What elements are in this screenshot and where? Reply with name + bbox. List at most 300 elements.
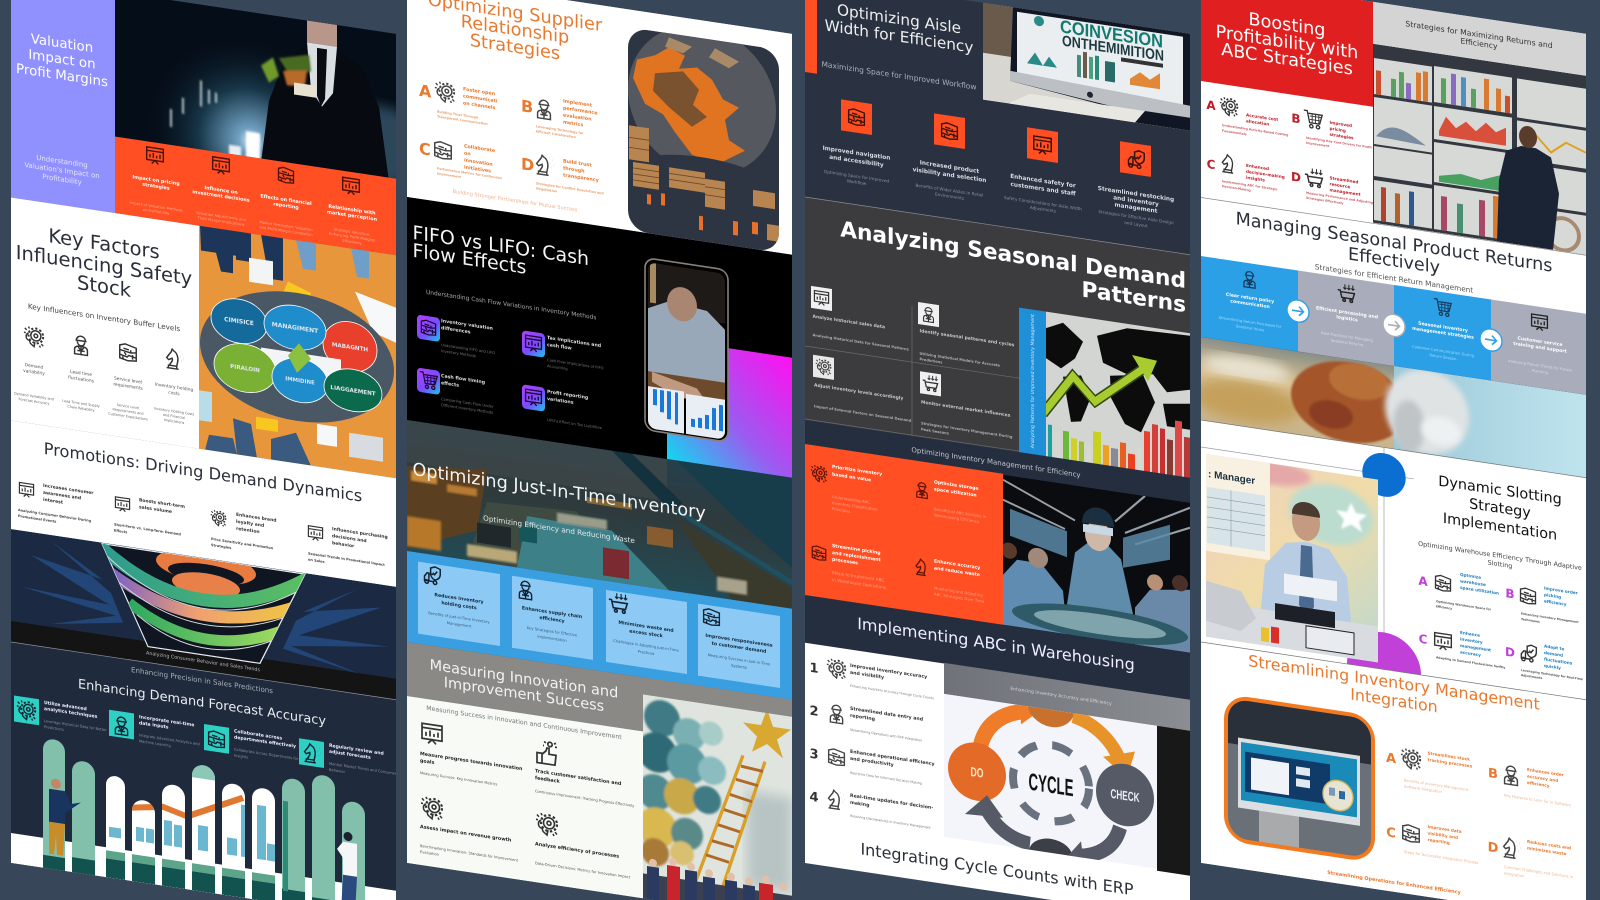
item B: performance [563, 105, 598, 117]
item: tax implications [522, 330, 604, 376]
card: supply chain: efficiency [539, 615, 565, 625]
item C: Decision-Making [1222, 184, 1251, 192]
slide: valuation impact [11, 0, 396, 256]
item: storage: space utilization [934, 486, 977, 499]
item: holding costs: and Financial [163, 413, 185, 420]
list item 3: and productivity [850, 756, 894, 768]
item: investment: investment decisions [192, 189, 250, 204]
item: financial reporting: and Profit Margin Correlation [259, 225, 313, 237]
item C: Improvement [437, 172, 462, 179]
panel: navy background [11, 642, 396, 900]
heading: key factors: Influencing Safety [16, 241, 193, 290]
item D: Adapt to [1544, 643, 1565, 652]
subtitle: maximizing space: Maximizing Space for Improved Workflow [821, 60, 977, 92]
item A: Benefits of Inventory Management [1404, 778, 1469, 792]
item: service level [108, 341, 148, 422]
item: holding costs: Implications [164, 418, 184, 425]
item: revenue growth: Assess impact on revenue growth [420, 824, 512, 844]
side strip label: Analyzing Patterns for Improved Inventory Management [1030, 313, 1036, 449]
item: prioritize: Prioritize inventory [832, 464, 882, 478]
item: prioritize: based on value [832, 472, 871, 483]
item D: Measuring Performance and Adjusting [1306, 191, 1373, 205]
heading: supplier relationships: Relationship [461, 11, 569, 48]
item: historical sales [811, 286, 909, 352]
item D: Integration [1504, 871, 1525, 879]
item: safety: Safety Considerations for Aisle Width [1004, 195, 1082, 212]
card: holding costs: Management [447, 621, 472, 629]
item: process efficiency [535, 812, 631, 880]
slide: promotions [11, 420, 396, 700]
item: service level: Service Level [117, 403, 139, 410]
item: demand variability: Forecast Accuracy [19, 397, 49, 406]
item: visibility: Benefits of Wider Aisles in Retail [916, 183, 983, 198]
heading: boosting profitability: Profitability with [1216, 22, 1358, 64]
column 4 [1191, 0, 1586, 900]
item B: picking [1544, 592, 1561, 600]
item A [419, 79, 498, 128]
list item 3 [809, 743, 935, 787]
heading: promotions: Promotions: Driving Demand Dynamics [44, 439, 362, 506]
panel: purple title [11, 0, 115, 213]
item: tax implications: cash flow [547, 342, 572, 352]
item: profit reporting [522, 384, 602, 430]
item: picking [812, 540, 887, 591]
panel: gray strip [1373, 2, 1586, 76]
item: seasonal patterns: Predictions [920, 357, 942, 365]
panel: white [1201, 642, 1586, 900]
subtitle: cash flow variations: Understanding Cash Flow Variations in Inventory Methods [426, 289, 596, 321]
item: purchasing decisions: Seasonal Trends in Promotional Impact [308, 552, 385, 567]
heading: dynamic slotting: Implementation [1443, 511, 1557, 544]
item: pricing: on Profitability [143, 208, 170, 216]
item: accuracy: and reduce waste [934, 565, 980, 578]
item: profit reporting: Profit reporting [547, 389, 588, 401]
item: awareness: Promotional Events [18, 514, 56, 524]
step 2: Seasonal Returns [1331, 339, 1363, 347]
item: prioritize: Inventory Classification [832, 500, 878, 512]
item A [1418, 566, 1499, 618]
label DO: DO [971, 764, 984, 781]
item: collaboration: departments effectively [234, 734, 296, 750]
monitor headline: COINVESION [1060, 16, 1163, 52]
item A: A [1418, 574, 1428, 589]
caption: building partnerships: Building Stronger Partnerships for Mutual Success [453, 189, 578, 214]
band: accuracy: Enhancing Inventory Accuracy and Efficiency [1010, 686, 1112, 707]
heading: JIT: Optimizing Just-In-Time Inventory [412, 460, 706, 524]
item: customer satisfaction: Track customer satisfaction and [535, 768, 622, 787]
item: awareness: Increases consumer [43, 483, 94, 496]
slide: demand forecast [11, 642, 397, 900]
panel: white [1201, 420, 1586, 700]
item B: strategies [1330, 132, 1354, 140]
item A [1386, 744, 1473, 799]
list item 2 [809, 700, 923, 743]
item: review forecasts: adjust forecasts [329, 749, 371, 761]
item: historical sales: Analyzing Historical Data for Seasonal Patterns [812, 333, 909, 352]
item: navigation [823, 97, 890, 190]
item D [1505, 638, 1583, 686]
step 4 [1491, 300, 1586, 395]
subtitle: key influencers: Key Influencers on Inventory Buffer Levels [28, 302, 180, 333]
item D: Negotiation [536, 186, 558, 194]
item: accuracy: ABC Strategies Over Time [934, 591, 985, 604]
item A: Transparent Communication [437, 115, 488, 126]
photo: team around table [199, 225, 396, 479]
item: pricing: Impact of Valuation Methods [130, 201, 183, 213]
step 3: Return Season [1430, 353, 1457, 361]
slide: seasonal demand [805, 197, 1190, 479]
chart: world map with arrow and bars [1043, 311, 1190, 479]
subtitle: maximizing returns: Efficiency [1460, 36, 1498, 51]
item: brand loyalty: retention [236, 526, 260, 535]
heading: key factors: Key Factors [48, 224, 160, 264]
column 2 [407, 0, 792, 900]
item: purchasing decisions: on Sales [308, 558, 325, 564]
item: review forecasts: Monitor Market Trends and Consumer [329, 762, 397, 776]
item: tax implications: Tax implications and [547, 335, 601, 349]
item: historical sales: Analyze historical sales data [812, 314, 885, 330]
item: visibility: visibility and selection [913, 167, 986, 184]
table bubble labels: PIRALOIN [230, 364, 260, 374]
poster text: : Manager [1208, 469, 1255, 487]
item B [521, 92, 598, 143]
item A: allocation [1246, 118, 1269, 127]
item: progress: goals [420, 758, 435, 766]
slide: supplier relationships [407, 0, 792, 255]
panel: black [407, 197, 792, 478]
item: adjust inventory: Adjust inventory levels accordingly [814, 382, 903, 402]
item A: A [1206, 98, 1216, 113]
item: process efficiency: Data-Driven Decisions: Metrics for Innovation Impact [535, 861, 631, 880]
item: storage [917, 477, 987, 525]
item: analytics: Predictions [44, 725, 64, 732]
item: real-time data: data inputs [139, 720, 169, 731]
item: navigation: Optimizing Space for Improved [824, 169, 889, 184]
item A: Optimize [1460, 572, 1481, 580]
item: market perception: Enhancing Profit Margins [329, 232, 375, 243]
item A: tracking processes [1428, 757, 1473, 769]
item D: Common Challenges and Solutions in [1504, 865, 1574, 879]
slide: cycle counts [805, 642, 1190, 900]
item A: space utilization [1460, 585, 1499, 596]
item B: Key Features to Look for in Software [1504, 793, 1571, 808]
item: financial reporting: reporting [273, 201, 299, 211]
item: awareness: awareness and [43, 490, 81, 501]
item: lead time: Chain Reliability [67, 404, 95, 413]
item: adjust inventory [813, 355, 912, 423]
illustration: arches with analysts [11, 728, 396, 900]
heading: FIFO vs LIFO: Flow Effects [413, 239, 526, 279]
step 4: Planning [1532, 369, 1549, 375]
card: holding costs: Reduces inventory [434, 592, 484, 605]
item B: Improve order [1544, 585, 1579, 596]
item A: Foster open [463, 86, 496, 97]
item: sales volume: Short-Term vs. Long-Term Demand [114, 522, 181, 537]
item: profit reporting: LIFO's Effect on Tax Liabilities [547, 418, 602, 430]
item: cash flow timing: Different Inventory Methods [441, 403, 493, 415]
item: picking: and replenishment [832, 550, 882, 563]
arrow 2 [1383, 313, 1405, 338]
item D: through [563, 165, 585, 175]
panel: white [407, 0, 792, 255]
arrow 1 [1287, 298, 1309, 324]
item A: Fundamentals [1222, 129, 1247, 136]
subtitle: warehouse efficiency: Slotting [1488, 559, 1512, 570]
item: pricing: Impact on pricing [132, 174, 180, 187]
item D: quickly [1544, 663, 1561, 671]
slide: inventory integration [1201, 642, 1586, 900]
item: cash flow timing: Comparing Cash Flow Under [441, 397, 494, 409]
card: responsiveness: to customer demand [712, 641, 766, 655]
item D: management [1330, 187, 1361, 197]
panel: white [805, 643, 1190, 900]
item: analytics [14, 696, 107, 732]
item C: Adapting to Demand Fluctuations Swiftly [1436, 655, 1505, 670]
item: navigation: and accessibility [829, 155, 884, 169]
item: real-time data: Integrate Advanced Analytics and [139, 733, 200, 746]
item: financial reporting: Market Perception: Valuation [259, 220, 313, 232]
item B: Efficient Collaboration [536, 129, 577, 139]
list item 2: Streamlined data entry and [850, 706, 923, 723]
item C: C [1207, 157, 1216, 172]
list item 3: 3 [809, 747, 819, 763]
photo: monitor on desk [983, 3, 1190, 131]
label CYCLE: CYCLE [1028, 769, 1073, 802]
item C: Collaborate [464, 144, 496, 154]
panel: white text area [11, 198, 199, 449]
item: restocking: management [1115, 202, 1158, 215]
panel: blue side strip [1019, 308, 1046, 457]
item: restocking [1098, 138, 1174, 232]
column 3 [805, 0, 1190, 900]
subtitle: maximizing returns: Strategies for Maximizing Returns and [1405, 19, 1553, 50]
subtitle: efficiency: Optimizing Efficiency and Reducing Waste [483, 513, 635, 545]
item: real-time data: Incorporate real-time [139, 714, 194, 728]
item: awareness: interest [43, 497, 64, 506]
item C: C [1419, 632, 1428, 647]
photo: analyst at chart wall [1373, 44, 1586, 258]
item: lead time: Lead Time and Supply [62, 399, 100, 408]
item: cash flow timing [417, 368, 494, 415]
item: customer satisfaction [535, 740, 635, 808]
item A: A [419, 81, 432, 102]
item: collaboration: Insights [234, 753, 248, 760]
item: safety: Enhanced safety for [1010, 174, 1076, 190]
item: purchasing decisions: behavior [332, 540, 355, 550]
item: navigation: Improved navigation [823, 146, 890, 162]
item D: D [1488, 840, 1499, 857]
item D: minimizes waste [1527, 845, 1566, 856]
heading: seasonal returns: Effectively [1348, 245, 1440, 278]
band: accuracy [944, 663, 1190, 731]
gradient block [667, 339, 792, 478]
photo: globe and logistics [628, 15, 781, 253]
item: brand loyalty: Strategies [211, 543, 231, 550]
subtitle: precision: Enhancing Precision in Sales Predictions [131, 665, 273, 695]
item: valuation differences [417, 314, 495, 361]
item: review forecasts: Regularly review and [329, 743, 384, 757]
item: tax implications: Cash Flow Implications of FIFO [547, 358, 604, 370]
list item 1: 1 [809, 661, 819, 677]
item B: Techniques [1521, 617, 1540, 624]
item: safety: Adjustments [1030, 205, 1056, 214]
slide: just-in-time [407, 420, 792, 700]
item: sales volume: sales volume [139, 504, 172, 515]
item C: Enhanced [1246, 163, 1269, 171]
card: responsiveness: Systems [731, 664, 747, 670]
item A: Efficiency [1436, 604, 1452, 611]
heading: dynamic slotting: Dynamic Slotting [1438, 474, 1562, 508]
dividers [805, 290, 1020, 452]
item D: Strategies for Conflict Resolution and [536, 181, 604, 196]
item: progress: Measuring Success: Key Innovation Metrics [420, 771, 498, 787]
accent strip [805, 0, 817, 74]
item: external influences [920, 371, 1013, 445]
column 1 [11, 0, 423, 900]
item D: demand [1544, 650, 1563, 658]
item C: management [1460, 643, 1491, 653]
heading: seasonal demand: Analyzing Seasonal Demand [840, 217, 1186, 294]
photo: ladder to star [637, 690, 792, 900]
slide: implementing ABC [805, 420, 1190, 700]
decorative circle: blue [1362, 450, 1406, 500]
item A: on channels [463, 100, 496, 111]
step 1: Streamlining Return Processes for [1219, 316, 1282, 329]
subtitle: efficient return: Strategies for Efficient Return Management [1315, 262, 1473, 295]
step 4: Customer service [1518, 336, 1562, 348]
list item 3: Real-time Data for Informed Decision-Making [850, 771, 922, 786]
slide: ABC profitability [1201, 0, 1586, 258]
slide: dynamic slotting [1201, 420, 1586, 700]
step 2: Best Practices for Managing [1321, 331, 1373, 343]
card: waste: excess stock [629, 628, 664, 639]
step 3: Customer Communication During [1412, 345, 1475, 358]
slide: measuring innovation [407, 642, 792, 900]
item: picking: processes [832, 557, 858, 566]
item: storage: Benefits of ABC Analysis in [934, 506, 987, 519]
item: lead time: Lead time [70, 369, 92, 378]
item B: Enhancing Inventory Management [1521, 612, 1579, 624]
item: awareness: Analyzing Consumer Behavior During [18, 508, 92, 523]
item D: Reduces costs and [1527, 839, 1571, 850]
item C: Performance Metrics for Continuous [437, 167, 502, 180]
item B: evaluation [563, 112, 592, 123]
heading: measuring innovation: Improvement Success [444, 674, 604, 715]
subtitle: understanding valuation: Understanding [36, 153, 88, 169]
item B: pricing [1330, 126, 1346, 133]
item B: Identifying Key Cost Drivers for Profit [1306, 136, 1372, 150]
step 1 [1201, 256, 1298, 352]
heading: supplier relationships: Strategies [470, 30, 560, 64]
item B: B [1488, 766, 1498, 783]
item C [1386, 818, 1478, 865]
item: awareness [18, 482, 94, 523]
item: restocking: and inventory [1113, 195, 1159, 208]
table bubble labels: IMMIDINE [285, 376, 315, 387]
item: analytics: Leverage Historical Data for Better [44, 719, 107, 732]
item: safety [1004, 124, 1082, 218]
decorative circle: purple [1347, 627, 1421, 675]
list item 1: Enhancing Inventory Accuracy through Cycle Counts [850, 684, 934, 700]
card: responsiveness [698, 604, 780, 688]
item C [1207, 152, 1285, 198]
item C: on [464, 152, 471, 158]
item C: visibility and [1428, 830, 1458, 840]
item D: D [1505, 645, 1515, 660]
card: holding costs [418, 562, 500, 646]
panel: blue points [407, 551, 792, 700]
item: brand loyalty: loyalty and [236, 519, 264, 529]
item: visibility: Environments [935, 192, 964, 201]
panel: gray header [407, 642, 792, 754]
panel: white top [11, 420, 396, 587]
list item 4: making [850, 800, 869, 809]
slide: aisle width [805, 0, 1190, 255]
item C: C [419, 139, 431, 160]
item B: Improved [1330, 120, 1352, 128]
item: process efficiency: Analyze efficiency of processes [535, 841, 619, 860]
step 3: Seasonal inventory [1418, 321, 1468, 334]
list item 2: 2 [809, 704, 819, 720]
list item 4 [809, 787, 933, 830]
item: market perception: Strategic Valuation: [334, 227, 370, 237]
item: accuracy: Monitoring and Adjusting [934, 585, 983, 598]
panel: red title [1201, 0, 1373, 107]
item: cash flow timing: Cash flow timing [441, 373, 485, 386]
item: progress [420, 723, 523, 790]
item: prioritize: Understanding ABC [832, 494, 870, 505]
item: purchasing decisions: Influences purchasing [332, 526, 388, 540]
item C: accuracy [1460, 649, 1481, 658]
item C: C [1386, 825, 1396, 842]
item: service level: Service level [114, 375, 142, 386]
heading: boosting profitability: Boosting [1249, 10, 1325, 41]
item: market perception: Effectively [342, 239, 362, 246]
item: collaboration: Collaborate Across Departments for [234, 747, 299, 761]
item: seasonal patterns [918, 302, 1015, 375]
item D: Strategies Effectively [1306, 196, 1343, 205]
heading: FIFO vs LIFO: FIFO vs LIFO: Cash [412, 221, 589, 270]
item A: warehouse [1460, 578, 1486, 587]
item C: Implementing ABC for Strategic [1222, 179, 1278, 191]
caption: consumer behavior: Analyzing Consumer Behavior and Sales Trends [146, 650, 260, 673]
table bubble labels: MABAGNTH [332, 342, 368, 354]
arrow 3 [1480, 327, 1502, 353]
photo: manager with clipboard [1206, 451, 1378, 663]
photo: warehouse [407, 420, 792, 609]
item B: accuracy and [1527, 773, 1558, 783]
item: investment: Valuation Adjustments and [196, 211, 246, 222]
item A: Optimizing Warehouse Space for [1436, 599, 1492, 612]
heading: streamlining: Integration [1350, 684, 1438, 716]
step 1: communication [1230, 298, 1270, 310]
item: revenue growth [420, 796, 519, 869]
item: valuation differences: differences [441, 325, 471, 336]
item A: Building Trust Through [437, 110, 479, 120]
figure: man left [49, 778, 81, 858]
item: customer satisfaction: Continuous Improvement: Tracking Progress Effectively [535, 789, 635, 808]
item: service level: Requirements and [113, 407, 143, 416]
item: analytics: Utilize advanced [44, 700, 87, 712]
step 4: training and support [1513, 341, 1568, 355]
item: purchasing decisions: decisions and [332, 533, 367, 544]
item C: Enhance [1460, 630, 1480, 638]
card: supply chain: Implementation [537, 635, 567, 643]
item A: Software Integration [1404, 784, 1442, 794]
item: lead time: fluctuations [68, 375, 95, 385]
item B: Implement [563, 98, 593, 109]
item: prioritize: Principles [832, 506, 851, 514]
